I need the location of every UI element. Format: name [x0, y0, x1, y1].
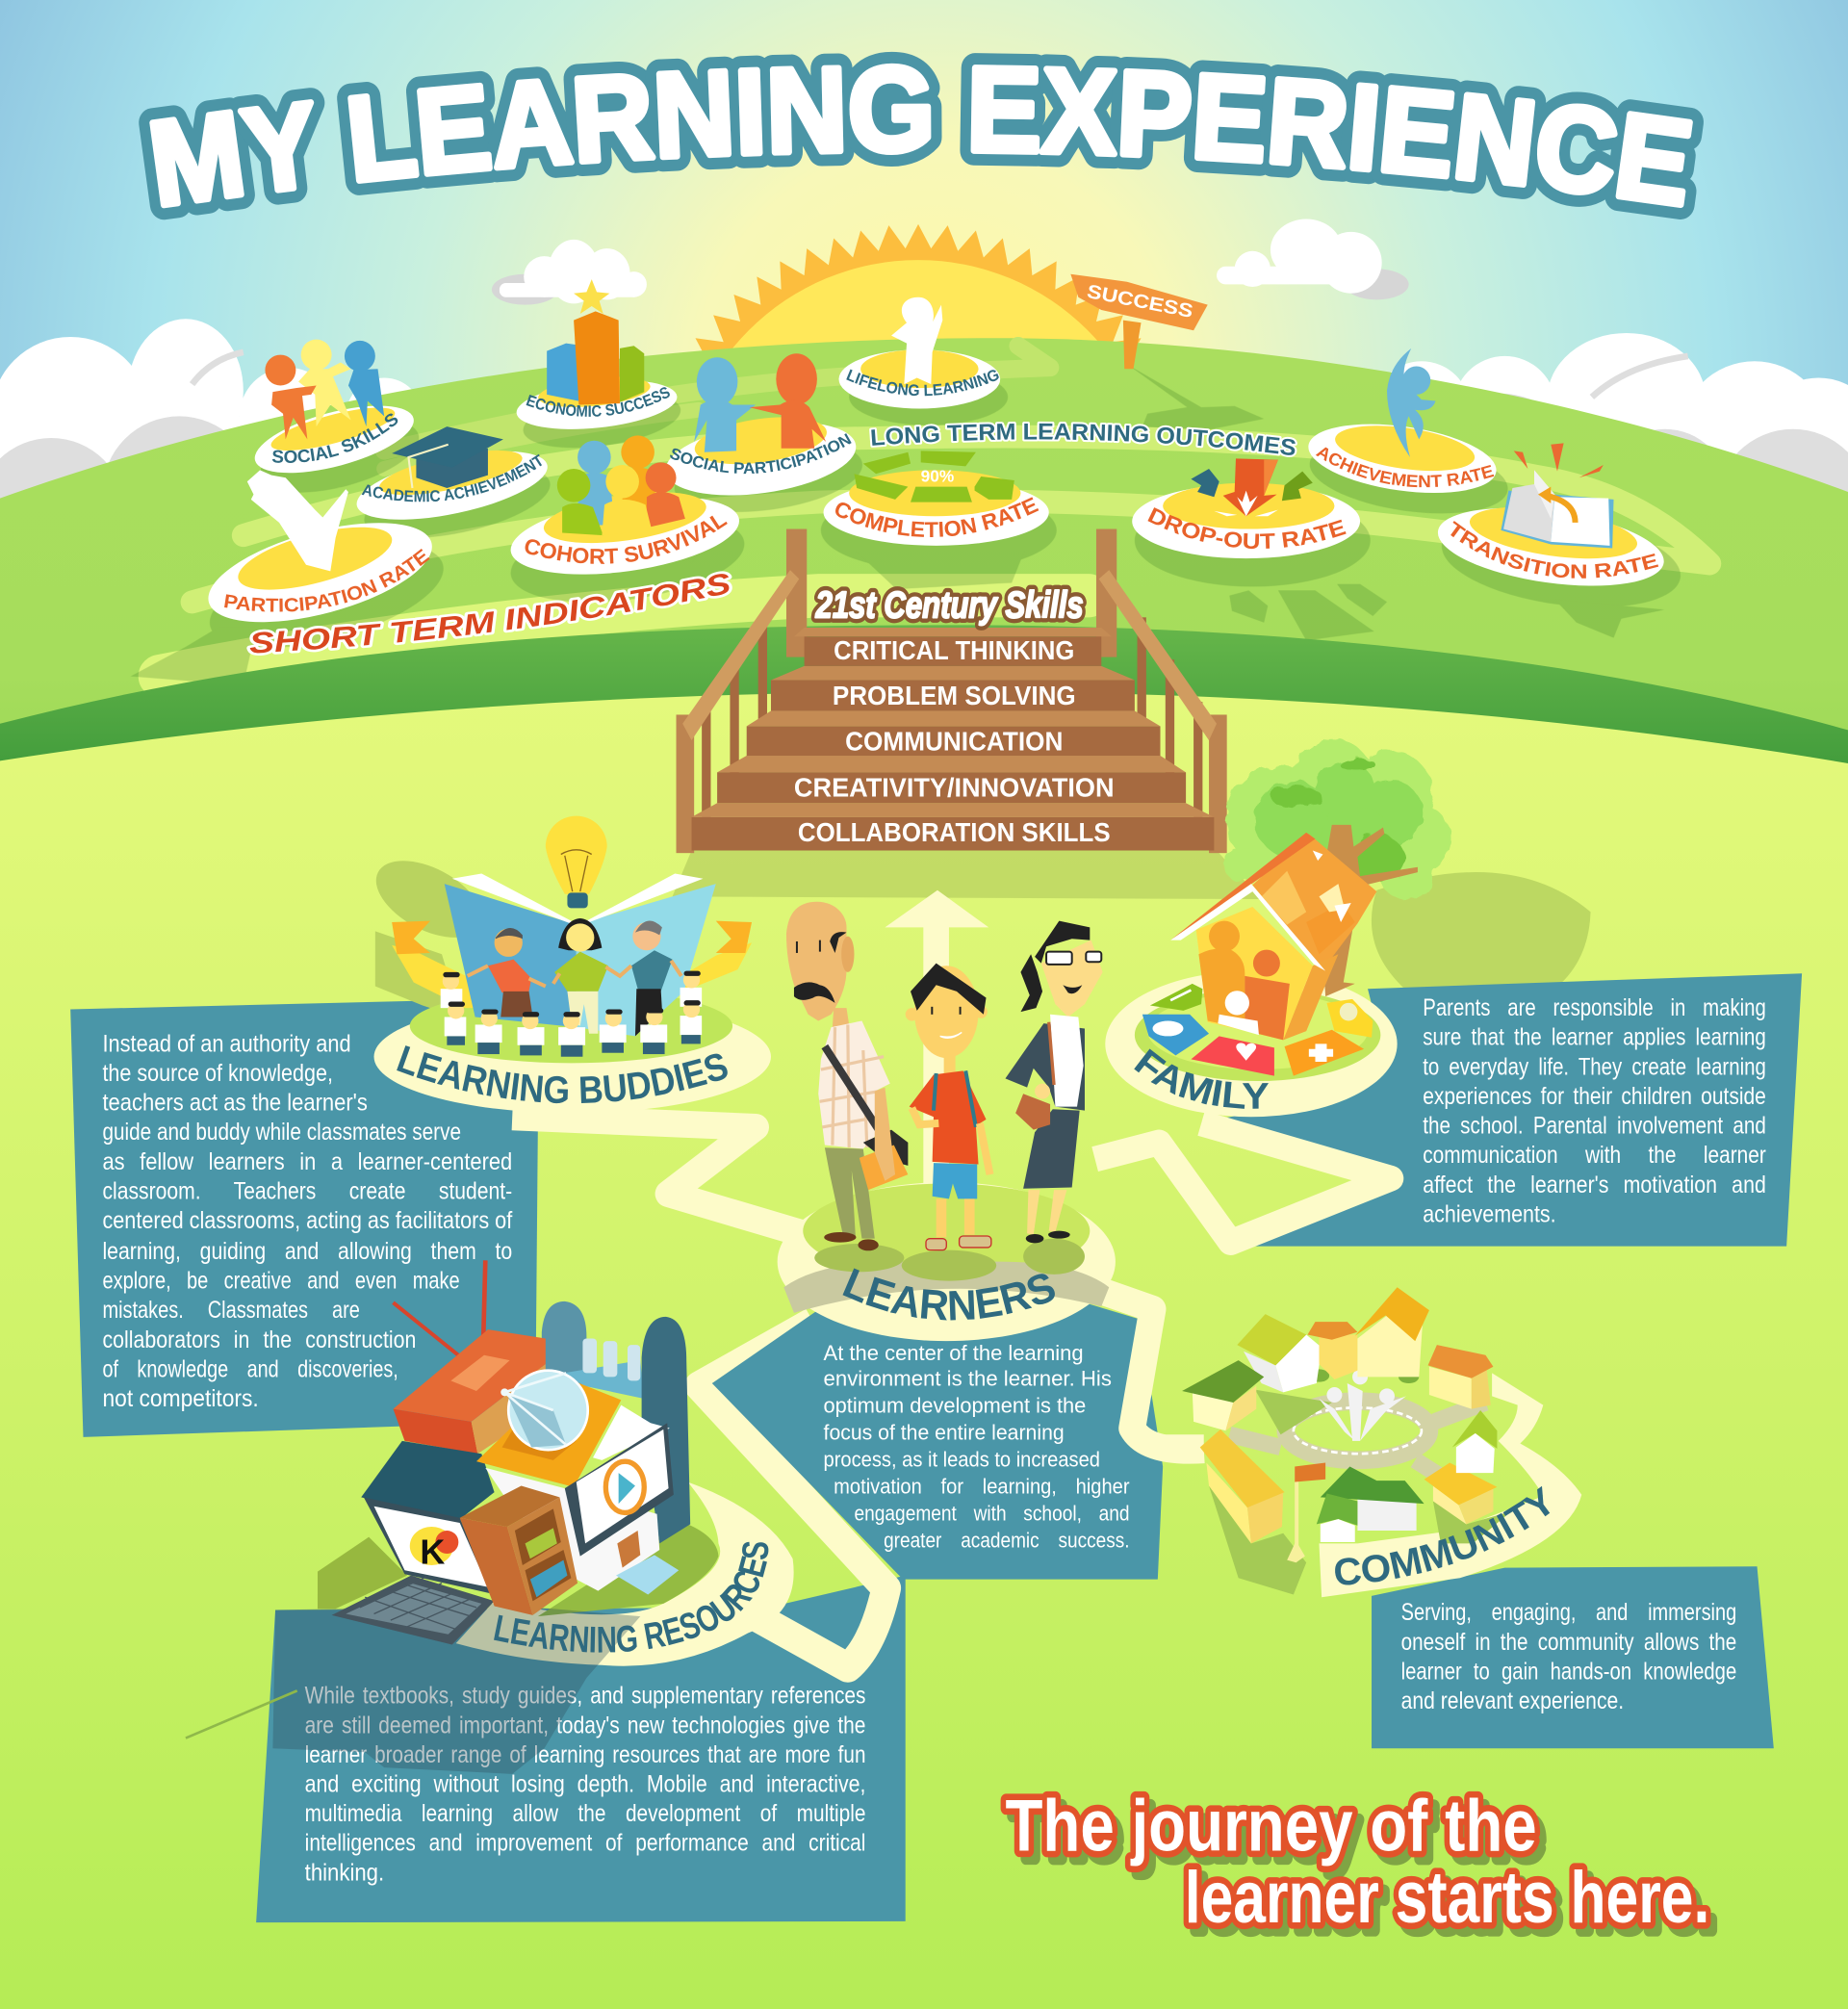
- text: buddies paragraph: Instead of an authority and: [102, 1031, 351, 1057]
- tagline: [1005, 1786, 1716, 1946]
- text: buddies paragraph: as fellow learners in a learner-centered: [102, 1149, 512, 1175]
- icon: down arrows: [1191, 458, 1313, 516]
- icon: group of people: [557, 435, 685, 535]
- text: resources paragraph: multimedia learning allow the development of multiple: [305, 1801, 865, 1827]
- text: learners paragraph: greater academic success.: [884, 1528, 1130, 1552]
- clouds: large left: [0, 319, 423, 586]
- text: buddies paragraph: explore, be creative and even make: [102, 1269, 460, 1295]
- text: buddies paragraph: classroom. Teachers create student-: [102, 1178, 512, 1204]
- disc: social skills: SOCIAL SKILLS: [271, 414, 398, 463]
- stair labels: PROBLEM SOLVING: [833, 681, 1076, 710]
- hill shadows: [131, 365, 1686, 685]
- icon: white figure: [891, 297, 942, 384]
- stair treads: [692, 628, 1214, 817]
- tree trunk: [1319, 825, 1418, 996]
- stair shadow: [673, 850, 1262, 899]
- disc: drop-out rate: DROP-OUT RATE: [1147, 507, 1347, 549]
- label: family: FAMILY: [1134, 1049, 1269, 1109]
- text: buddies paragraph: guide and buddy while classmates serve: [102, 1120, 461, 1146]
- label: long term learning outcomes: LONG TERM LEARNING OUTCOMES: [869, 422, 1297, 457]
- icon: laptop with logo: [332, 1441, 495, 1644]
- tagline shadow: learner starts here.: [1191, 1865, 1716, 1946]
- text: buddies paragraph: mistakes. Classmates are: [102, 1298, 360, 1324]
- ring: buddies: [374, 1000, 771, 1113]
- stair labels: CREATIVITY/INNOVATION: [794, 773, 1115, 803]
- text: learners paragraph: environment is the learner. His: [824, 1367, 1112, 1391]
- text: family paragraph: Parents are responsible in making: [1423, 995, 1766, 1021]
- tree shadow: [1372, 872, 1591, 1012]
- sun: [679, 224, 1158, 739]
- text: community paragraph: [1401, 1600, 1736, 1714]
- text: family paragraph: achievements.: [1423, 1201, 1556, 1227]
- ground shadows: [318, 1537, 407, 1609]
- text: community paragraph: and relevant experience.: [1401, 1688, 1624, 1714]
- stair labels: COMMUNICATION: [845, 727, 1063, 757]
- text: resources paragraph: intelligences and improvement of performance and critical: [305, 1831, 865, 1857]
- inner roads: [1229, 1402, 1485, 1505]
- panel: family text block: [1095, 973, 1802, 1247]
- text: resources paragraph: While textbooks, study guides, and supplementary references: [305, 1684, 865, 1710]
- title: MY LEARNING EXPERIENCE: [139, 52, 1704, 219]
- ring: learners: [778, 1182, 1116, 1341]
- shadows: [364, 845, 495, 1018]
- text: buddies paragraph: not competitors.: [102, 1386, 259, 1412]
- text: learners paragraph: motivation for learning, higher: [834, 1474, 1130, 1498]
- tagline text: [1005, 1786, 1709, 1939]
- figure: teacher man: [786, 902, 908, 1250]
- text: learners paragraph: [824, 1341, 1130, 1552]
- tall tubes: [542, 1301, 690, 1543]
- disc: social skills: [254, 339, 414, 474]
- stairs: [677, 529, 1227, 853]
- disc: transition rate: [1438, 443, 1664, 585]
- icon: tree house: [1170, 833, 1376, 1040]
- tagline text: The journey of the: [1005, 1786, 1537, 1867]
- icon: graduation cap: [392, 426, 503, 488]
- ring: resources: [456, 1481, 794, 1666]
- text: buddies paragraph: of knowledge and discoveries,: [102, 1356, 398, 1382]
- disc: cohort survival: [510, 435, 739, 575]
- disc: participation rate: PARTICIPATION RATE: [224, 549, 429, 612]
- disc: achievement rate: ACHIEVEMENT RATE: [1316, 447, 1494, 487]
- children row: [441, 971, 702, 1057]
- tagline shadow: [1012, 1793, 1716, 1946]
- label: short term indicators: SHORT TERM INDICATORS: [246, 571, 732, 656]
- ring: family: [1105, 971, 1398, 1117]
- figure: teacher woman: [1005, 921, 1103, 1243]
- disc: social participation: SOCIAL PARTICIPATION: [670, 433, 852, 474]
- road: to community: [1101, 1291, 1204, 1451]
- text: community paragraph: learner to gain hands-on knowledge: [1401, 1659, 1736, 1685]
- disc: achievement rate: [1308, 348, 1497, 493]
- disc: social participation: [667, 353, 857, 495]
- icon: community tree: [1309, 1348, 1419, 1441]
- hill stripes: [160, 346, 1709, 677]
- title: MY LEARNING EXPERIENCE: [149, 64, 1693, 208]
- icon: bookshelf: [460, 1485, 578, 1615]
- adult figures: [468, 918, 681, 1036]
- cloud: small left: [492, 240, 647, 305]
- back hill: [0, 338, 1848, 820]
- illustration: community: [1165, 1287, 1582, 1598]
- disc: transition rate: TRANSITION RATE: [1450, 521, 1659, 579]
- icon: 90 percent ring chart: [854, 451, 1014, 502]
- disc: economic success: ECONOMIC SUCCESS: [526, 387, 670, 417]
- text: family paragraph: sure that the learner applies learning: [1423, 1025, 1766, 1051]
- text: resources paragraph: [305, 1684, 865, 1886]
- ribbons: [392, 921, 752, 1008]
- heading: 21st century skills: 21st Century Skills: [815, 584, 1084, 626]
- disc: participation rate: [208, 470, 432, 622]
- stair labels: [794, 635, 1115, 847]
- disc: lifelong learning: LIFELONG LEARNING: [846, 370, 999, 397]
- ground shadows: [1209, 1390, 1511, 1595]
- road from buddies: [512, 1117, 833, 1243]
- text: community paragraph: Serving, engaging, and immersing: [1401, 1600, 1736, 1626]
- text: family paragraph: experiences for their children outside: [1423, 1084, 1766, 1110]
- stair risers: [692, 636, 1214, 850]
- text: buddies paragraph: learning, guiding and allowing them to: [102, 1239, 512, 1265]
- icon: tree: [1224, 739, 1451, 899]
- text: learners paragraph: process, as it leads to increased: [824, 1448, 1100, 1472]
- icon: three friends: [265, 340, 384, 439]
- disc: drop-out rate: [1132, 458, 1360, 558]
- shadow on panel: [272, 1604, 640, 1774]
- figure: boy learner: [906, 964, 991, 1250]
- icon: play screen building: [476, 1377, 679, 1595]
- panel: community text block: [1372, 1566, 1774, 1748]
- clouds: large right: [1373, 333, 1848, 582]
- illustration: learning buddies: [373, 816, 771, 1111]
- text: learners paragraph: optimum development is the: [824, 1394, 1086, 1418]
- antenna shadow: [186, 1690, 297, 1739]
- illustration: learning resources: [185, 1260, 794, 1774]
- illustration: learners: [778, 901, 1116, 1342]
- heading: 21st century skills: 21st Century Skills: [815, 584, 1084, 626]
- icon: satellite dish: [500, 1371, 588, 1450]
- disc: completion rate: [824, 451, 1049, 546]
- text: resources paragraph: and exciting without losing depth. Mobile and interactive,: [305, 1771, 865, 1797]
- panel: learners text block: [712, 1301, 1163, 1580]
- wheel tiles: [1142, 984, 1373, 1076]
- text: buddies paragraph: collaborators in the construction: [102, 1327, 416, 1353]
- front lawn: [0, 692, 1848, 2009]
- text: family paragraph: [1423, 995, 1766, 1227]
- icon: bar chart with star: [547, 279, 644, 404]
- text: learners paragraph: At the center of the learning: [824, 1341, 1084, 1365]
- icon: radio with antennas: [393, 1260, 546, 1454]
- road: to resources: [699, 1322, 886, 1667]
- stair labels: COLLABORATION SKILLS: [798, 817, 1111, 847]
- icon: two people: [694, 353, 826, 452]
- text: family paragraph: communication with the learner: [1423, 1143, 1766, 1169]
- label: learners: LEARNERS: [843, 1269, 1055, 1321]
- dark band of hill: [0, 625, 1848, 820]
- disc: economic success: [516, 279, 678, 429]
- houses: [1182, 1287, 1497, 1562]
- text: learners paragraph: focus of the entire learning: [824, 1421, 1065, 1445]
- arrow: upward path: [885, 890, 988, 1229]
- cloud: small right: [1217, 219, 1409, 299]
- disc: lifelong learning: [839, 296, 1001, 408]
- ring: community road: [1319, 1373, 1581, 1597]
- panel: learning buddies text block: [70, 1000, 833, 1437]
- tagline shadow: The journey of the: [1012, 1793, 1543, 1875]
- disc: academic achievement: ACADEMIC ACHIEVEMENT: [362, 454, 542, 502]
- text: buddies paragraph: centered classrooms, acting as facilitators of: [102, 1208, 512, 1234]
- disc: completion rate: COMPLETION RATE: [835, 497, 1040, 537]
- icon: lightbulb: [546, 816, 607, 908]
- text: buddies paragraph: the source of knowledge,: [102, 1061, 333, 1087]
- icon: raised hand: [247, 470, 348, 571]
- illustration: family: [1105, 738, 1451, 1117]
- text: buddies paragraph: [102, 1031, 512, 1412]
- stair labels: CRITICAL THINKING: [834, 635, 1074, 665]
- text: resources paragraph: learner broader range of learning resources that are more fun: [305, 1742, 865, 1768]
- panel: learning resources text block: [256, 1576, 906, 1922]
- text: family paragraph: to everyday life. They create learning: [1423, 1054, 1766, 1080]
- icon: open book: [445, 873, 716, 1036]
- text: family paragraph: the school. Parental involvement and: [1423, 1114, 1766, 1140]
- icon: open book with arrow: [1501, 443, 1614, 548]
- text: resources paragraph: thinking.: [305, 1860, 384, 1886]
- label: learning resources: LEARNING RESOURCES: [494, 1542, 768, 1653]
- text: buddies paragraph: teachers act as the learner's: [102, 1091, 368, 1117]
- tagline text: learner starts here.: [1185, 1857, 1709, 1939]
- stair rails: [677, 529, 1227, 853]
- text: family paragraph: affect the learner's motivation and: [1423, 1172, 1766, 1198]
- text: resources paragraph: are still deemed important, today's new technologies give the: [305, 1713, 865, 1739]
- text: learners paragraph: engagement with school, and: [854, 1501, 1130, 1525]
- success post and sign: [1070, 274, 1208, 369]
- disc: academic achievement: [356, 426, 548, 520]
- icon: jumping blue figure: [1387, 348, 1436, 457]
- label: learning buddies: LEARNING BUDDIES: [397, 1045, 728, 1103]
- text: community paragraph: oneself in the community allows the: [1401, 1630, 1736, 1656]
- icon: laptop with logo: K: [420, 1533, 445, 1572]
- disc: cohort survival: COHORT SURVIVAL: [526, 516, 728, 564]
- icon: 90 percent ring chart: 90%: [921, 466, 954, 485]
- label: community: COMMUNITY: [1335, 1486, 1550, 1584]
- success post and sign: SUCCESS: [1085, 281, 1194, 322]
